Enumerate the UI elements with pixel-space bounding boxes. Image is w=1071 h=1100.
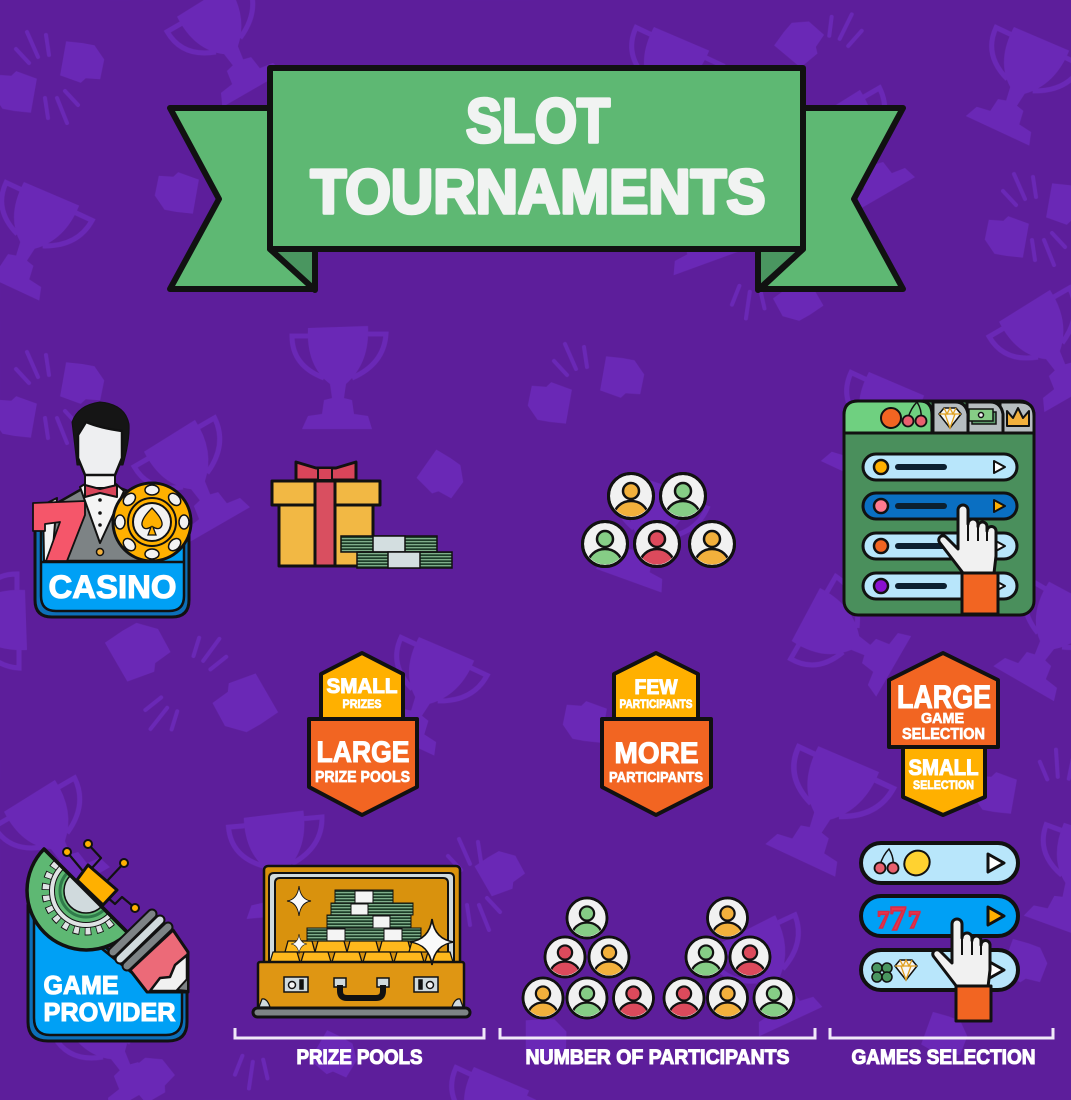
badge: large game selection vs small selection: SELECTION xyxy=(913,778,974,792)
bracket and label: games selection xyxy=(830,1028,1053,1069)
badge: small prizes vs large prize pools: PRIZE POOLS xyxy=(315,769,410,786)
game provider emblem xyxy=(27,840,188,1041)
badge: large game selection vs small selection xyxy=(889,653,998,815)
bracket and label: number of participants: NUMBER OF PARTICIPANTS xyxy=(526,1046,790,1069)
window frame xyxy=(844,401,1034,615)
casino label: CASINO xyxy=(48,569,176,605)
case base xyxy=(258,962,464,1008)
sevens: 7 xyxy=(877,907,890,934)
badge plate xyxy=(35,525,189,617)
badge: large game selection vs small selection: GAME xyxy=(921,710,964,727)
title ribbon banner xyxy=(170,68,903,290)
grey tabs xyxy=(933,402,1034,433)
badge: large game selection vs small selection: SELECTION xyxy=(902,726,985,743)
casino dealer figure xyxy=(43,402,145,561)
icon: two groups of many participants xyxy=(523,898,794,1029)
badge: small prizes vs large prize pools: SMALL xyxy=(326,674,398,698)
badge: few participants vs more participants: PARTICIPANTS xyxy=(609,769,703,786)
icon: open briefcase with gold and cash xyxy=(253,866,470,1017)
left ribbon tail xyxy=(170,108,315,290)
pencil xyxy=(113,914,188,992)
icon: small group of participants xyxy=(582,474,734,579)
right ribbon tail xyxy=(758,108,903,290)
active green tab xyxy=(844,401,932,433)
bracket and label: prize pools: PRIZE POOLS xyxy=(296,1046,422,1069)
play arrows xyxy=(988,854,1004,979)
badge: small prizes vs large prize pools xyxy=(309,653,417,815)
bracket and label: number of participants xyxy=(500,1028,815,1069)
sevens: 7 xyxy=(889,899,906,938)
game provider label: GAME xyxy=(44,970,118,1000)
cash stacks xyxy=(341,536,452,568)
badge: large game selection vs small selection: SMALL xyxy=(908,755,979,780)
latches and handle xyxy=(284,977,438,992)
title text: TOURNAMENTS xyxy=(310,158,766,227)
casino emblem xyxy=(33,402,191,617)
icon: slot game selection buttons with hand xyxy=(861,843,1018,1021)
bracket and label: games selection: GAMES SELECTION xyxy=(852,1046,1036,1069)
pointing hand xyxy=(933,919,990,987)
badge: large game selection vs small selection: LARGE xyxy=(897,679,991,715)
clover and diamond xyxy=(872,963,892,982)
banner face xyxy=(270,68,803,249)
red lucky seven xyxy=(33,501,85,561)
pointing hand xyxy=(939,505,996,573)
badge: few participants vs more participants: FEW xyxy=(634,675,678,699)
case lid xyxy=(264,866,460,966)
badge: few participants vs more participants xyxy=(602,653,711,815)
sevens: 7 xyxy=(908,907,920,934)
title text: SLOT xyxy=(466,87,610,156)
green half dial with gear xyxy=(27,849,128,950)
sparkles xyxy=(287,886,454,965)
badge: small prizes vs large prize pools: PRIZES xyxy=(342,699,382,711)
badge: small prizes vs large prize pools: LARGE xyxy=(316,736,410,769)
badge: few participants vs more participants: PARTICIPANTS xyxy=(620,699,693,711)
badge plate xyxy=(28,905,187,1041)
cash pile xyxy=(307,890,421,941)
casino chip xyxy=(113,483,191,561)
sevens xyxy=(877,899,920,938)
game provider emblem: PROVIDER xyxy=(44,997,176,1027)
icon: gift box and cash stacks xyxy=(272,462,452,568)
circuit chip xyxy=(63,840,139,912)
gold bars xyxy=(270,941,453,962)
bracket and label: prize pools xyxy=(235,1028,484,1069)
cherries and lemon xyxy=(874,849,898,874)
tab icons xyxy=(881,408,901,428)
icon: game lobby window with hand selecting a game xyxy=(844,401,1034,615)
game list rows xyxy=(863,454,1017,599)
badge: few participants vs more participants: MORE xyxy=(614,737,698,770)
